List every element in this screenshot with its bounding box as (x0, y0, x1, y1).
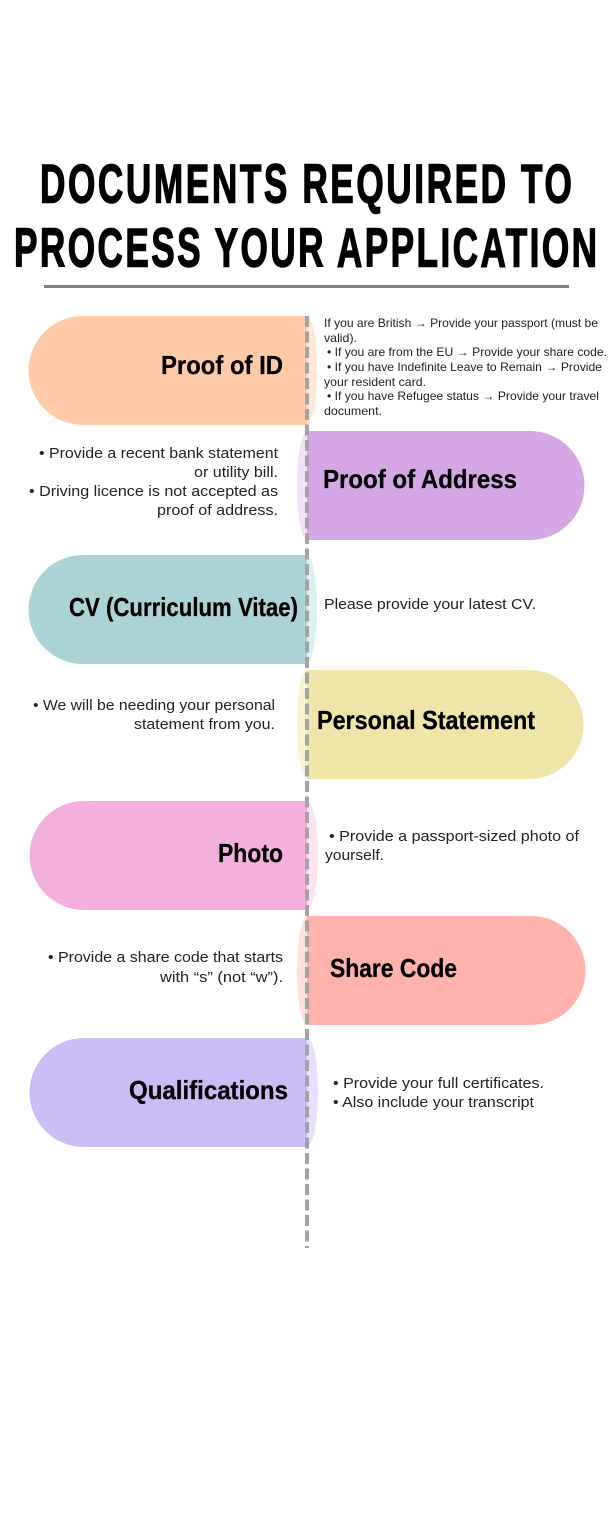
text: proof of address details: or utility bill. (194, 464, 278, 481)
panel: photo: Photo (218, 838, 283, 868)
text: proof of address details: proof of address. (157, 502, 278, 519)
text: qualifications details: • Also include your transcript (333, 1094, 535, 1111)
text: proof of address details (29, 445, 279, 519)
panel: proof of address (297, 431, 584, 540)
title: PROCESS YOUR APPLICATION (14, 216, 597, 278)
text: proof of address details: • Driving licence is not accepted as (29, 483, 278, 500)
text: qualifications details (333, 1075, 544, 1111)
panel: CV (28, 555, 317, 664)
panel: proof of ID: Proof of ID (161, 350, 283, 380)
text: share code details: with “s” (not “w”). (159, 969, 283, 986)
panel: share code (297, 916, 586, 1025)
title (14, 152, 597, 278)
panel: photo (30, 801, 318, 910)
panel: proof of ID (28, 316, 317, 425)
panel: share code: Share Code (330, 953, 457, 983)
text: personal statement details: • We will be needing your personal (33, 697, 275, 714)
text: CV details: Please provide your latest CV. (324, 596, 536, 613)
text: proof of ID details: your resident card. (324, 375, 426, 389)
panel: proof of address: Proof of Address (323, 464, 517, 494)
text: photo details: yourself. (325, 847, 384, 864)
text: photo details: • Provide a passport-sized photo of (329, 828, 580, 845)
text: proof of ID details: • If you are from the EU → Provide your share code. (327, 345, 607, 359)
text: personal statement details (33, 697, 275, 733)
panel: CV: CV (Curriculum Vitae) (69, 592, 298, 622)
timeline dashed line (305, 316, 309, 1248)
text: photo details (325, 828, 580, 864)
text: proof of address details: • Provide a recent bank statement (39, 445, 279, 462)
text: share code details: • Provide a share code that starts (48, 949, 283, 966)
panel: personal statement: Personal Statement (317, 705, 535, 735)
panel: personal statement (297, 670, 584, 779)
text: proof of ID details: valid). (324, 331, 357, 345)
title: DOCUMENTS REQUIRED TO (40, 152, 572, 214)
panel: qualifications (29, 1038, 318, 1147)
text: personal statement details: statement from you. (134, 716, 275, 733)
text: proof of ID details: • If you have Indefinite Leave to Remain → Provide (327, 360, 602, 374)
text: proof of ID details (324, 316, 607, 418)
title underline (44, 285, 569, 288)
text: qualifications details: • Provide your full certificates. (333, 1075, 544, 1092)
text: proof of ID details: • If you have Refugee status → Provide your travel (327, 389, 599, 403)
text: proof of ID details: If you are British → Provide your passport (must be (324, 316, 598, 330)
panel: qualifications: Qualifications (129, 1075, 288, 1105)
text: share code details (48, 949, 283, 986)
text: proof of ID details: document. (324, 404, 382, 418)
